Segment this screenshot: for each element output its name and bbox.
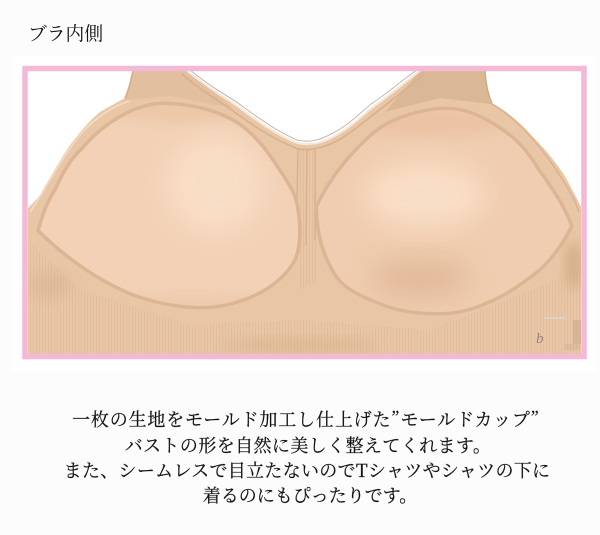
description text: バストの形を自然に美しく整えてくれます。: [125, 432, 491, 458]
garment: [28, 70, 583, 354]
care label print: [536, 317, 581, 350]
heading: ブラ内側: [28, 19, 103, 46]
neckline edge: [187, 71, 420, 144]
panel: bra photo illustration: [22, 66, 587, 360]
center gore: [297, 148, 315, 245]
right cup: [318, 108, 570, 312]
description text: 着るのにもぴったりです。: [203, 482, 417, 508]
rib texture: [28, 240, 581, 354]
white photo background: [13, 56, 595, 372]
description text: また、シームレスで目立たないのでTシャツやシャツの下に: [64, 457, 550, 483]
garment shading: [34, 274, 66, 296]
description text: [64, 406, 550, 508]
side seams: [30, 101, 130, 212]
description text: 一枚の生地をモールド加工し仕上げた”モールドカップ”: [72, 406, 540, 432]
garment body: [28, 71, 581, 354]
care label print: b: [536, 331, 544, 347]
pink frame: [25, 68, 584, 356]
left cup: [40, 94, 298, 315]
